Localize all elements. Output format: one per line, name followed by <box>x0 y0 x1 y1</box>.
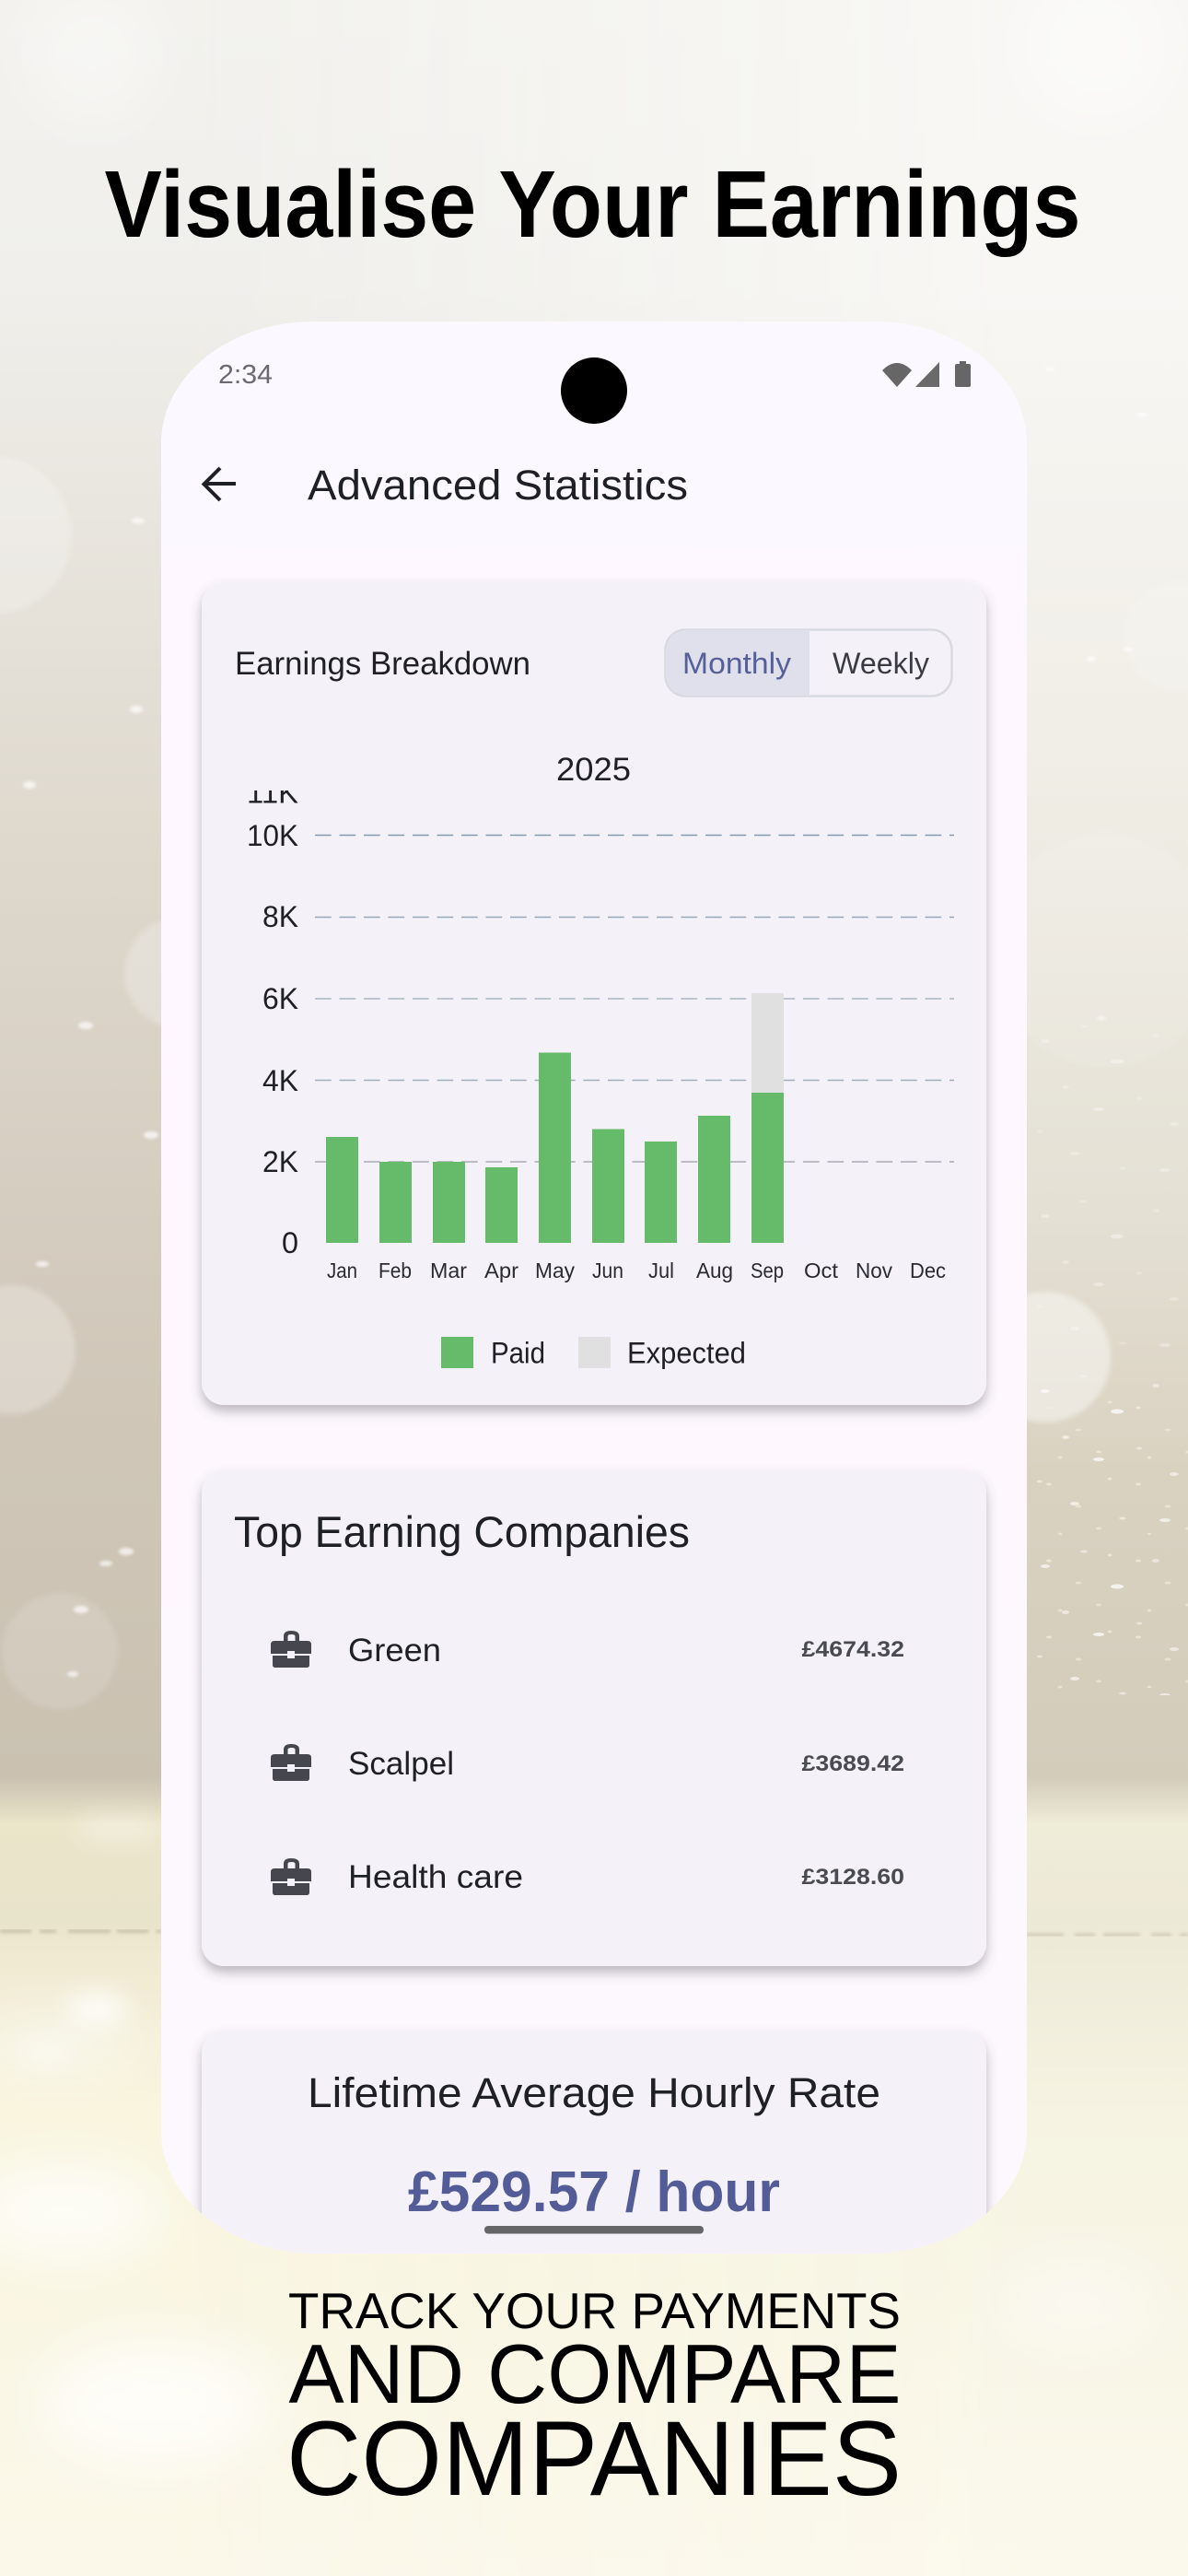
chart year label: 2025 <box>556 752 631 788</box>
x axis months: May <box>535 1259 575 1282</box>
panel: earnings breakdown <box>202 582 986 1405</box>
x axis months: Sep <box>751 1259 784 1282</box>
y axis labels <box>247 776 298 1259</box>
toggle: monthly / weekly: Monthly <box>682 647 791 680</box>
x axis months <box>327 1259 946 1282</box>
panel: top earning companies <box>202 1470 986 1966</box>
caption line 3: COMPANIES <box>286 2400 902 2518</box>
panel heading: Lifetime Average Hourly Rate <box>308 2069 880 2116</box>
phone mockup <box>161 322 1027 2325</box>
hourly rate value: £529.57 / hour <box>408 2160 780 2224</box>
bar: expected <box>751 993 784 1093</box>
chart legend: Expected <box>627 1336 746 1369</box>
icon: briefcase <box>271 1744 311 1781</box>
y axis labels: 2K <box>262 1145 298 1178</box>
icon: battery <box>955 361 971 387</box>
x axis months: Oct <box>804 1259 839 1282</box>
toggle: monthly / weekly <box>665 630 952 697</box>
row: Green <box>271 1631 904 1669</box>
caption <box>286 2282 902 2518</box>
bar chart: monthly earnings <box>247 776 954 1282</box>
row: Scalpel: Scalpel <box>348 1746 454 1782</box>
title: Visualise Your Earnings <box>105 151 1081 257</box>
icon: wifi <box>882 363 912 387</box>
x axis months: Dec <box>910 1259 946 1282</box>
row: Health care: £3128.60 <box>801 1865 904 1890</box>
panel: lifetime average hourly rate <box>195 2031 993 2254</box>
y axis labels: 6K <box>262 982 298 1015</box>
row: Green: £4674.32 <box>801 1637 904 1662</box>
icon: briefcase <box>271 1631 311 1668</box>
bars: paid <box>326 1052 784 1243</box>
camera cutout <box>561 357 627 424</box>
y axis labels: 10K <box>247 819 298 852</box>
x axis months: Jul <box>648 1259 674 1282</box>
icon: signal <box>915 362 939 387</box>
row: Green: Green <box>348 1633 441 1669</box>
x axis months: Jun <box>592 1259 623 1282</box>
status bar time: 2:34 <box>218 360 273 390</box>
y axis labels: 0 <box>282 1226 298 1259</box>
chart legend: Paid <box>491 1336 545 1369</box>
y axis labels: 4K <box>262 1064 298 1097</box>
x axis months: Apr <box>484 1259 518 1282</box>
toggle: monthly / weekly: Weekly <box>833 647 929 680</box>
panel heading: Earnings Breakdown <box>235 646 530 682</box>
y axis labels: 8K <box>262 900 298 933</box>
y axis labels: 11K <box>247 776 298 809</box>
row: Health care <box>271 1858 904 1895</box>
row: Scalpel <box>271 1744 904 1782</box>
chart legend <box>441 1336 746 1369</box>
x axis months: Feb <box>379 1259 412 1282</box>
icon: back arrow <box>204 468 236 500</box>
caption line 1: TRACK YOUR PAYMENTS <box>288 2282 901 2339</box>
panel heading: Top Earning Companies <box>234 1507 690 1556</box>
row: Scalpel: £3689.42 <box>801 1751 904 1776</box>
x axis months: Aug <box>696 1259 733 1282</box>
x axis months: Jan <box>327 1259 357 1282</box>
x axis months: Mar <box>430 1259 467 1282</box>
gesture bar <box>484 2226 704 2233</box>
screen title: Advanced Statistics <box>308 462 688 509</box>
row: Health care: Health care <box>348 1859 523 1895</box>
icon: briefcase <box>271 1858 311 1895</box>
caption line 2: AND COMPARE <box>289 2328 901 2421</box>
x axis months: Nov <box>856 1259 892 1282</box>
